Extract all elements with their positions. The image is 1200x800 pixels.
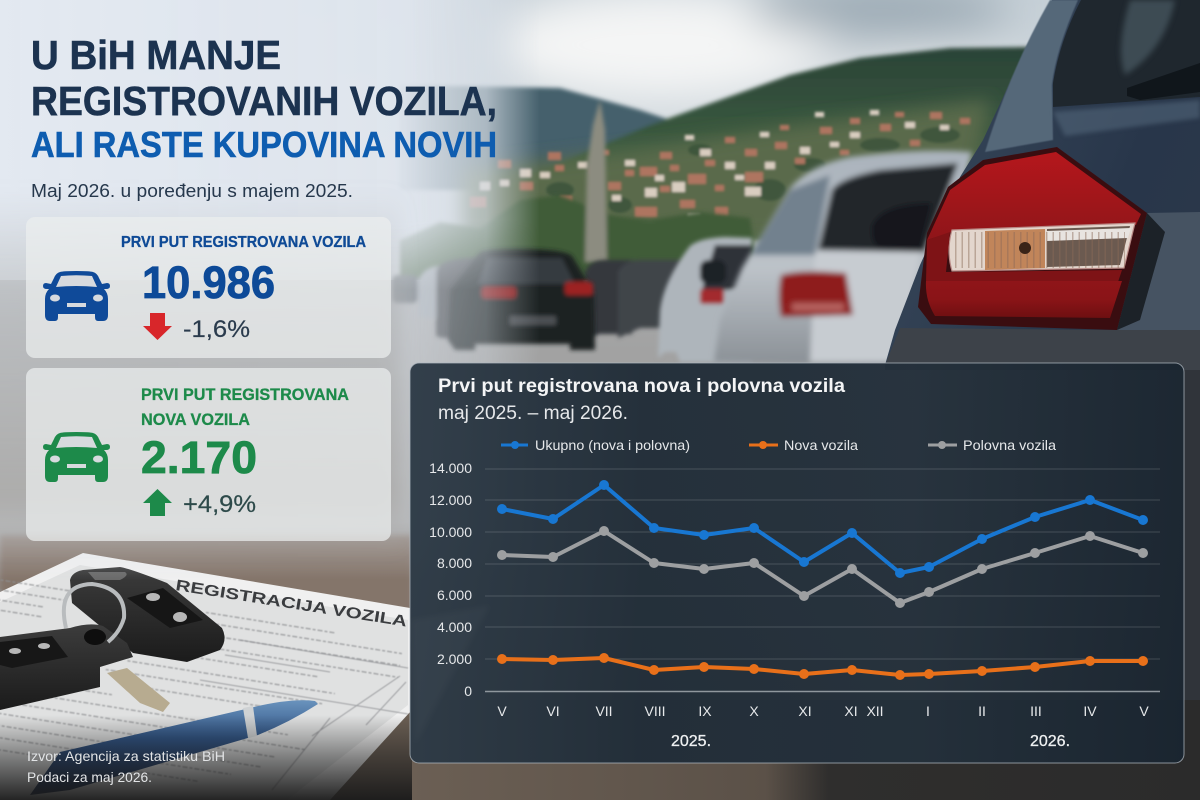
large dark car with tail light	[885, 0, 1200, 800]
key fob: upper	[70, 567, 225, 662]
legend: Ukupno (nova i polovna)	[535, 437, 690, 453]
source note: Izvor: Agencija za statistiku BiH	[27, 748, 225, 764]
x axis months: VII	[595, 703, 613, 719]
source note: Podaci za maj 2026.	[27, 769, 152, 785]
x axis months: XI	[844, 703, 858, 719]
change: -1,6%	[183, 316, 250, 343]
legend: Polovna vozila	[963, 437, 1056, 453]
chart title: Prvi put registrovana nova i polovna vozila	[438, 376, 845, 397]
registration document	[0, 553, 410, 800]
title: U BiH MANJE	[31, 32, 281, 78]
x axis months: II	[978, 703, 986, 719]
distant dark cars	[392, 258, 682, 338]
y axis labels: 4.000	[437, 619, 472, 635]
x axis months: V	[1139, 703, 1149, 719]
x axis months	[497, 703, 1149, 719]
legend	[501, 437, 1056, 453]
y axis labels: 10.000	[429, 524, 472, 540]
document title: REGISTRACIJA VOZILA	[174, 577, 408, 631]
subtitle: Maj 2026. u poređenju s majem 2025.	[31, 181, 353, 201]
x axis months: VI	[546, 703, 560, 719]
card heading: PRVI PUT REGISTROVANA	[141, 385, 349, 404]
y axis labels: 6.000	[437, 587, 472, 603]
title: REGISTROVANIH VOZILA,	[31, 78, 497, 124]
card heading	[141, 385, 349, 429]
x axis years: 2026.	[1030, 733, 1070, 750]
icon: red down arrow	[143, 313, 172, 340]
pen	[30, 700, 318, 795]
x axis months: XII	[866, 703, 884, 719]
x axis months: I	[926, 703, 930, 719]
car keys	[0, 567, 225, 712]
legend: Nova vozila	[784, 437, 858, 453]
y axis labels: 0	[464, 683, 472, 699]
value: 2.170	[141, 432, 257, 483]
key blade	[107, 668, 170, 712]
panel: line chart	[410, 363, 1184, 763]
silver car	[714, 151, 972, 365]
black SUV	[448, 249, 595, 350]
title: ALI RASTE KUPOVINA NOVIH	[31, 124, 497, 165]
y axis labels	[429, 460, 472, 699]
icon: green up arrow	[143, 489, 172, 516]
y axis labels: 8.000	[437, 555, 472, 571]
silver car in the middle	[658, 237, 752, 362]
panel: first-time registered vehicles	[26, 217, 391, 358]
x axis months: X	[749, 703, 759, 719]
hillside	[400, 47, 1030, 240]
y axis labels: 2.000	[437, 651, 472, 667]
source note	[27, 748, 225, 785]
town on the hillside	[460, 100, 990, 240]
icon: green car	[43, 432, 110, 482]
tree line and tower	[400, 100, 760, 290]
value: 10.986	[142, 257, 275, 308]
card heading: PRVI PUT REGISTROVANA VOZILA	[121, 234, 366, 251]
panel: first-time registered new vehicles	[26, 368, 391, 541]
x axis months: VIII	[644, 703, 666, 719]
card heading: NOVA VOZILA	[141, 410, 250, 429]
x axis months: III	[1030, 703, 1042, 719]
title	[31, 32, 497, 165]
road	[0, 280, 1200, 800]
wooden ground	[0, 535, 1200, 800]
y axis labels: 14.000	[429, 460, 472, 476]
x axis months: IX	[698, 703, 712, 719]
series: total	[497, 480, 1148, 578]
white haze behind left column	[0, 0, 540, 580]
y axis labels: 12.000	[429, 492, 472, 508]
key ring	[64, 584, 124, 642]
sky with clouds	[0, 0, 1200, 330]
x axis months: V	[497, 703, 507, 719]
change: +4,9%	[183, 491, 256, 518]
icon: blue car	[43, 271, 110, 321]
chart subtitle: maj 2025. – maj 2026.	[438, 403, 628, 424]
x axis years	[671, 733, 1070, 750]
key fob: left	[0, 624, 133, 710]
x axis years: 2025.	[671, 733, 711, 750]
bottom-left dark vignette	[0, 715, 412, 800]
series: new vehicles	[497, 653, 1148, 680]
tail light	[918, 147, 1147, 330]
x axis months: XI	[798, 703, 812, 719]
x axis months: IV	[1083, 703, 1097, 719]
series: used vehicles	[497, 526, 1148, 608]
